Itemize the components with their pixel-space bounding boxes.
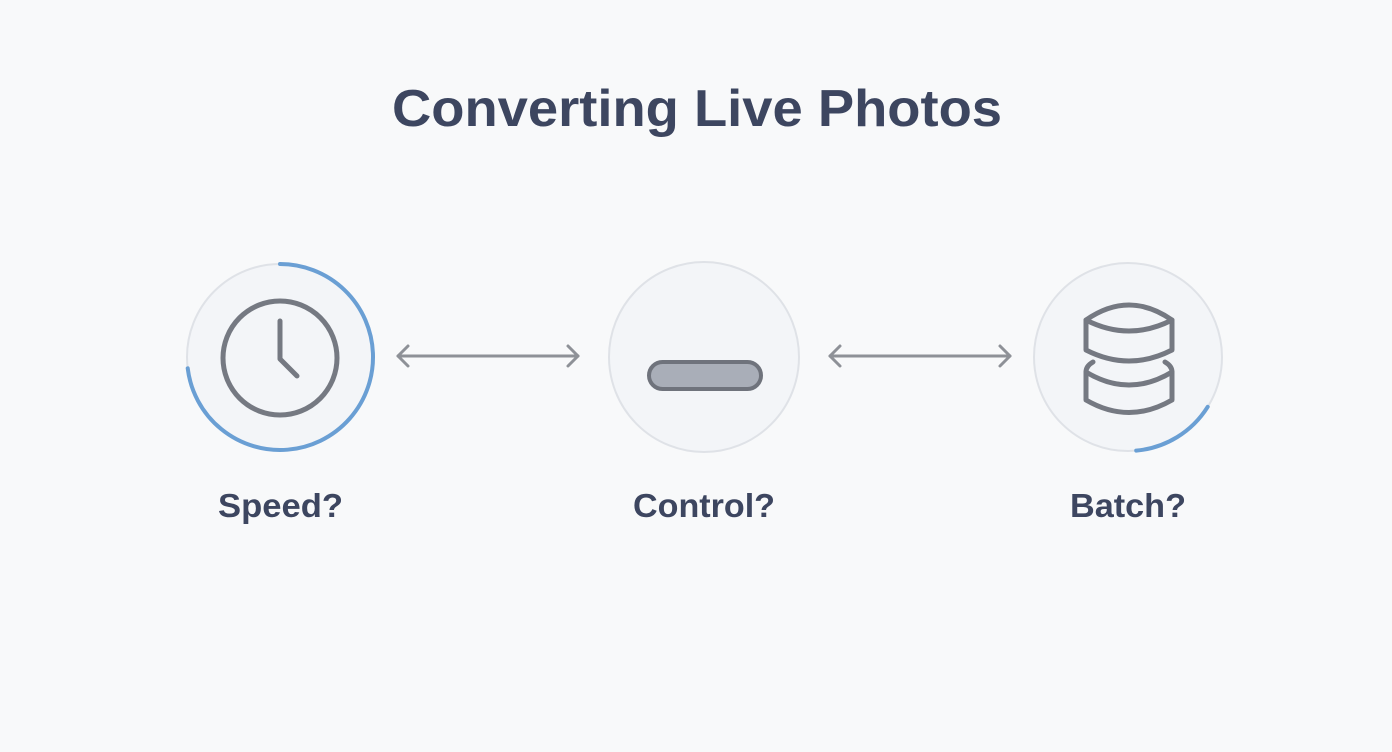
label: speed: Speed? bbox=[218, 487, 343, 524]
icon: stack bbox=[1086, 305, 1172, 412]
panel: speed bbox=[187, 264, 373, 524]
icon: clock bbox=[223, 301, 337, 415]
panel: control bbox=[609, 262, 799, 524]
progress arc: speed bbox=[188, 264, 373, 450]
label: batch: Batch? bbox=[1070, 487, 1186, 524]
panel: batch bbox=[1034, 263, 1222, 524]
arrow: control-batch bbox=[830, 346, 1010, 366]
progress arc: batch bbox=[1136, 407, 1208, 451]
title: Converting Live Photos bbox=[392, 80, 1002, 138]
arrow: speed-control bbox=[398, 346, 578, 366]
icon: pill bbox=[649, 362, 761, 389]
label: control: Control? bbox=[633, 487, 775, 524]
